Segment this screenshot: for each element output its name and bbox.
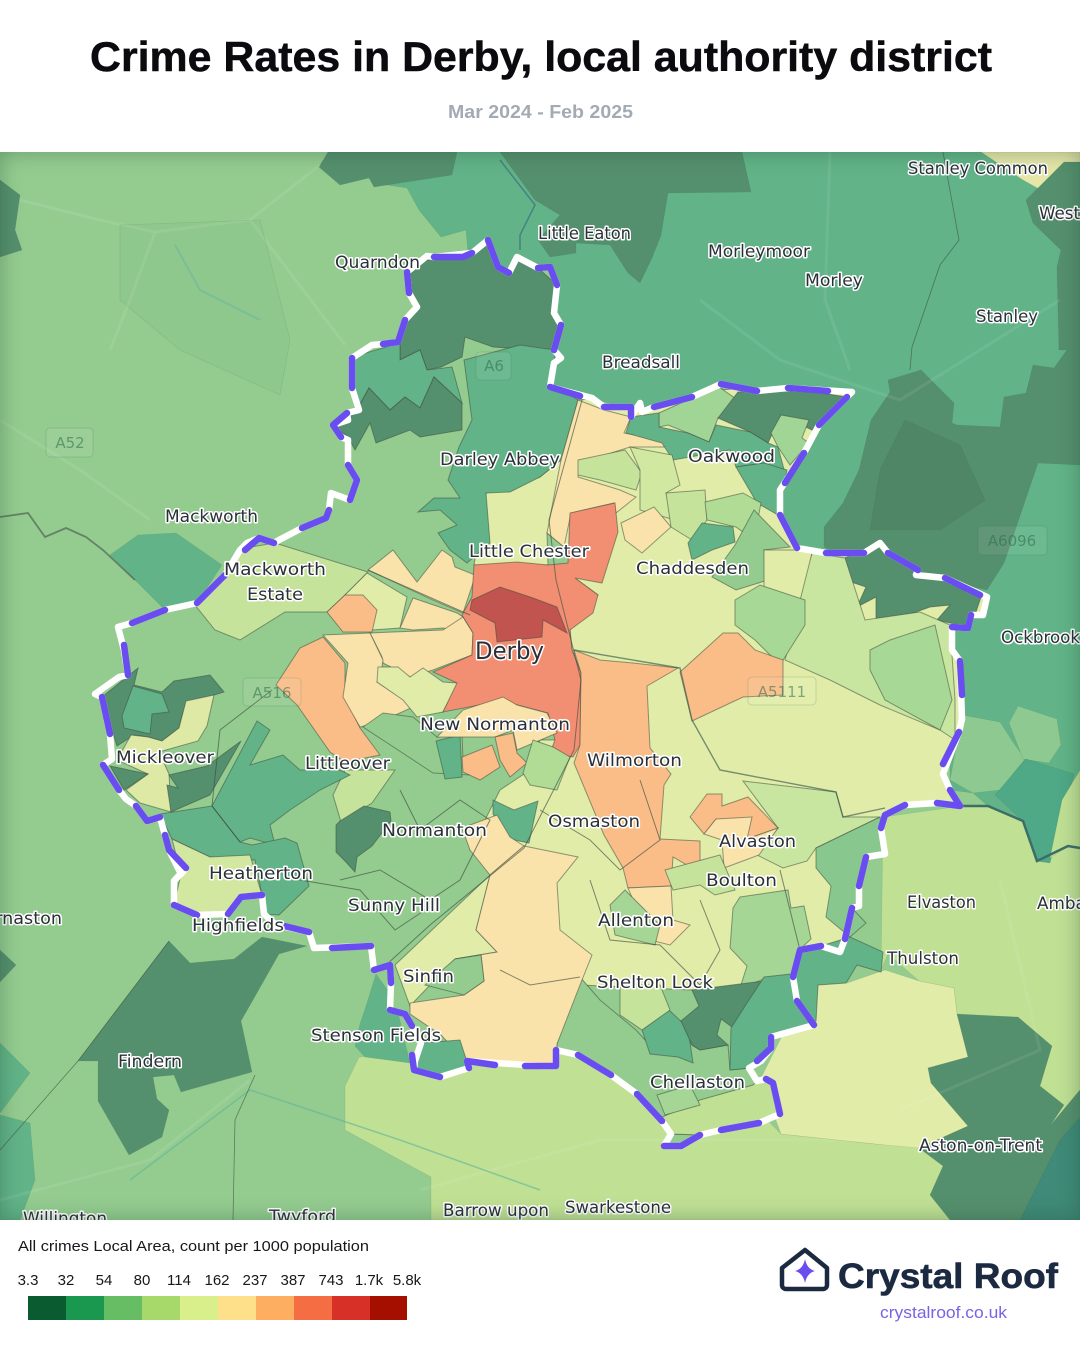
- road label A52: A52: [55, 434, 85, 452]
- label Sinfin: Sinfin: [403, 967, 454, 987]
- legend colour scale: [28, 1296, 407, 1320]
- label Findern: Findern: [118, 1052, 182, 1072]
- logo: Crystal Roof: [782, 1250, 1058, 1322]
- centre: [433, 503, 618, 757]
- roads and water on outer map: [0, 150, 1060, 1200]
- label Morley: Morley: [805, 271, 863, 291]
- label Mackworth: Mackworth: [165, 507, 258, 527]
- label New Normanton: New Normanton: [420, 715, 570, 735]
- label Stanley Common: Stanley Common: [908, 159, 1048, 179]
- label Swarkestone: Swarkestone: [565, 1198, 671, 1218]
- road label A6096: [978, 526, 1047, 555]
- legend values: 80: [134, 1272, 150, 1289]
- subtitle: date range: Mar 2024 - Feb 2025: [448, 102, 633, 122]
- road label A5111: A5111: [758, 683, 806, 701]
- website url: crystalroof.co.uk: [880, 1304, 1008, 1322]
- road label A5111: [748, 677, 816, 705]
- label Oakwood: Oakwood: [688, 447, 775, 467]
- legend values: 237: [242, 1272, 268, 1289]
- label Heatherton: Heatherton: [209, 864, 313, 884]
- outer areas around the district: [0, 152, 1080, 1220]
- road label A6096: A6096: [988, 532, 1036, 550]
- label Little Chester: Little Chester: [469, 542, 589, 562]
- label Allenton: Allenton: [598, 911, 674, 931]
- legend values: 162: [204, 1272, 230, 1289]
- map edge vignette: [0, 152, 1080, 1220]
- legend values: 5.8k: [393, 1272, 422, 1289]
- label Breadsall: Breadsall: [602, 353, 680, 373]
- road label A516: A516: [253, 684, 291, 702]
- legend values: 1.7k: [355, 1272, 384, 1289]
- label Morleymoor: Morleymoor: [708, 242, 810, 262]
- map panel: [0, 152, 1080, 1229]
- label Barrow upon: Barrow upon: [443, 1201, 549, 1221]
- label Wilmorton: Wilmorton: [587, 751, 682, 771]
- label Aston-on-Trent: Aston-on-Trent: [919, 1136, 1042, 1156]
- road label A516: [243, 678, 301, 706]
- river plain strip: [743, 781, 880, 868]
- label Willington: Willington: [23, 1209, 107, 1229]
- label Quarndon: Quarndon: [335, 253, 420, 273]
- label Stenson Fields: Stenson Fields: [311, 1026, 441, 1046]
- label Little Eaton: Little Eaton: [538, 224, 631, 244]
- label Sunny Hill: Sunny Hill: [348, 896, 440, 916]
- north dark and mid green: [400, 240, 561, 370]
- Normanton, Sinfin and south yellow: [462, 815, 524, 875]
- label Mackworth Estate: [224, 560, 326, 605]
- label Mickleover: Mickleover: [116, 748, 214, 768]
- legend values: 387: [280, 1272, 306, 1289]
- label Ockbrook: Ockbrook: [1001, 628, 1080, 648]
- label Darley Abbey: Darley Abbey: [440, 450, 560, 470]
- label Chellaston: Chellaston: [650, 1073, 745, 1093]
- label Twyford: Twyford: [268, 1207, 336, 1227]
- wordmark: Crystal Roof: [838, 1257, 1058, 1296]
- label Stanley: Stanley: [976, 307, 1038, 327]
- areas straddling the eastern boundary: [730, 817, 885, 1070]
- label Thulston: Thulston: [886, 949, 959, 969]
- label Mackworth Estate: Estate: [247, 585, 303, 605]
- legend values: 32: [58, 1272, 74, 1289]
- district base fill: [95, 240, 987, 1146]
- Breadsall to Chaddesden: [547, 400, 664, 547]
- label Chaddesden: Chaddesden: [636, 559, 749, 579]
- label Normanton: Normanton: [382, 821, 487, 841]
- ward boundary lines inside Derby: [212, 400, 885, 1020]
- district boundary: white line with purple dashes: [95, 240, 987, 1146]
- Wilmorton east and Alvaston: [690, 794, 778, 839]
- title: Crime Rates in Derby, local authority district: [90, 33, 992, 80]
- label West: West: [1039, 204, 1080, 224]
- label Osmaston: Osmaston: [548, 812, 640, 832]
- legend values: 114: [167, 1272, 191, 1289]
- legend values: 743: [318, 1272, 344, 1289]
- legend: [18, 1238, 422, 1320]
- legend title: All crimes Local Area, count per 1000 population: [18, 1238, 369, 1255]
- Mickleover and Littleover: [102, 668, 224, 746]
- small areas inside Derby: [102, 240, 1000, 1135]
- label Littleover: Littleover: [305, 754, 390, 774]
- road shields: [46, 352, 1047, 706]
- label Elvaston: Elvaston: [907, 893, 976, 913]
- icon: house with star: [782, 1250, 827, 1289]
- label Derby: Derby: [475, 637, 544, 665]
- legend values: [18, 1272, 422, 1289]
- road label A6: [476, 352, 511, 380]
- label Boulton: Boulton: [706, 871, 777, 891]
- rivers outside the district: [0, 152, 1080, 1220]
- label Shelton Lock: Shelton Lock: [597, 973, 713, 993]
- west yellow and orange: [368, 550, 475, 613]
- road label A6: A6: [484, 357, 504, 375]
- label Alvaston: Alvaston: [719, 832, 796, 852]
- label Highfields: Highfields: [192, 916, 284, 936]
- legend values: 54: [96, 1272, 112, 1289]
- pale east and north areas: [469, 389, 984, 990]
- label Mackworth Estate: Mackworth: [224, 560, 326, 580]
- road label A52: [46, 428, 93, 457]
- legend values: 3.3: [18, 1272, 38, 1289]
- place labels: [0, 159, 1080, 1229]
- map base: outer light green: [0, 152, 1080, 1220]
- south-east green: [730, 890, 811, 988]
